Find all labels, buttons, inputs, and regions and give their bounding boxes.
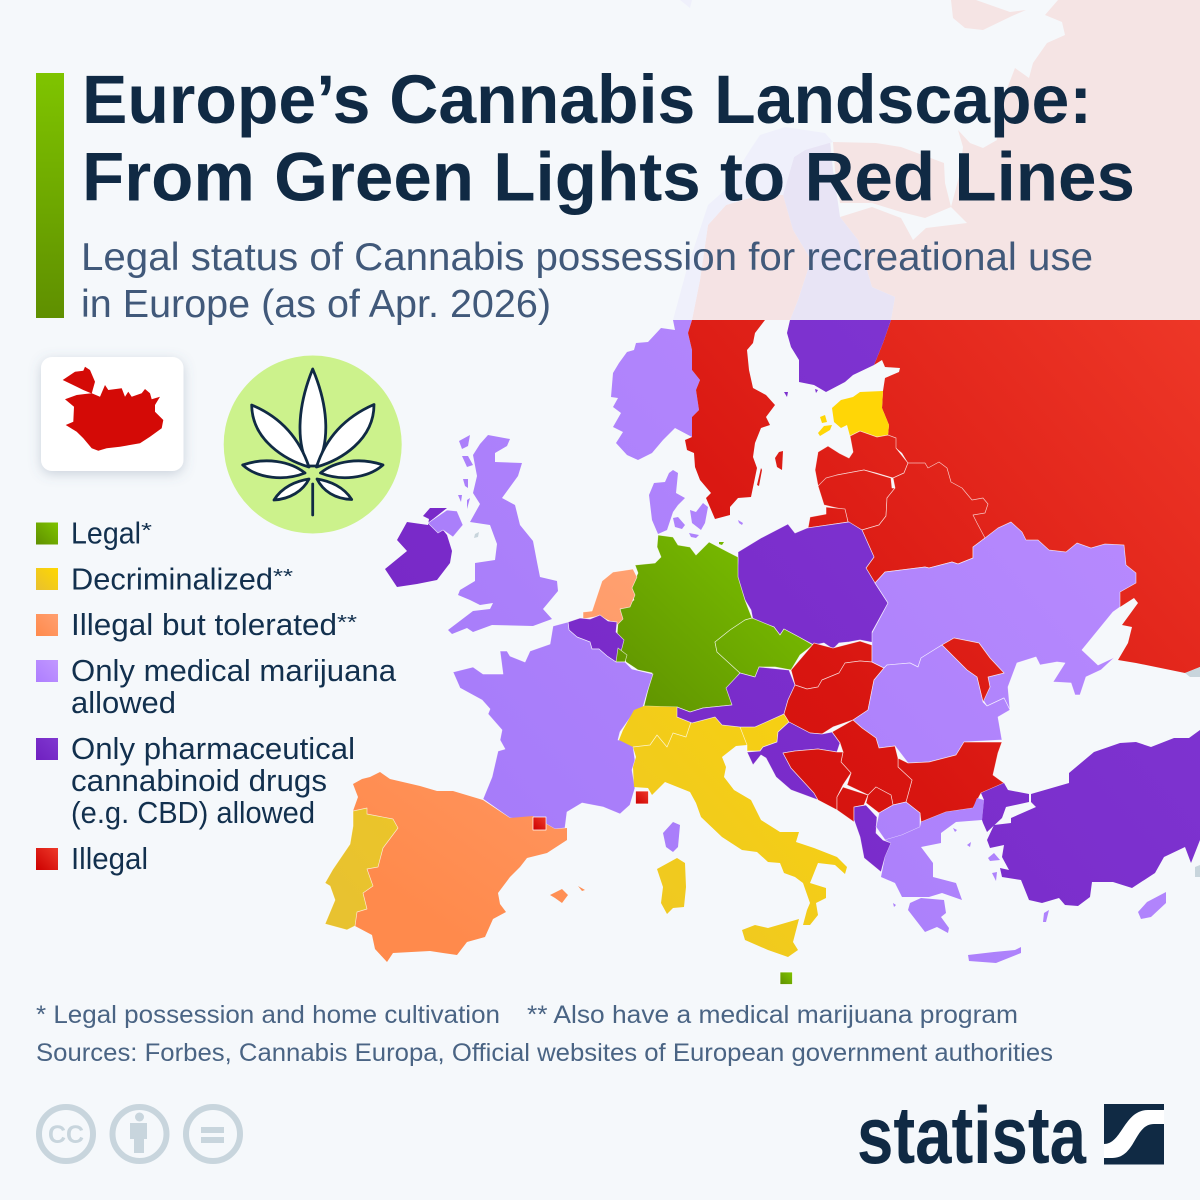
Romania [853,645,1010,763]
legend [36,516,396,876]
marker: Malta [780,972,792,984]
Latvia [815,431,908,486]
Kaliningrad [808,507,848,528]
Swiss border line [633,722,691,747]
footnotes: * Legal possession and home cultivation [36,1001,500,1029]
leaf: center [300,369,326,466]
Estonia [818,391,889,437]
marker: Monaco [636,791,648,804]
leaf: middle left [243,461,305,478]
logo mark [1104,1104,1164,1164]
Portugal [325,808,398,930]
title: From Green Lights to Red Lines [82,138,1135,216]
Slovenia [740,714,789,751]
Moldova [942,638,1004,702]
legend: only medical [36,654,396,720]
Finland [784,320,891,397]
Austria [677,667,795,727]
sources: Sources: Forbes, Cannabis Europa, Official websites of European government authorities [36,1039,1053,1067]
Denmark [649,470,743,538]
Albania [854,805,891,872]
legend: legal: * [141,520,152,542]
legend: only pharmaceutical: (e.g. CBD) allowed [71,796,315,830]
Belgium [568,615,624,662]
leaf: upper right [316,404,374,467]
Germany [617,535,752,712]
legend: only pharmaceutical: cannabinoid drugs [71,764,327,798]
Belarus [862,462,988,583]
legend: decriminalized: Decriminalized [71,562,273,596]
Serbia [832,720,912,805]
Statista logo: statista [857,1091,1087,1181]
Iceland card [41,357,184,471]
Luxembourg [616,648,627,662]
stem [311,484,314,515]
accent bar [36,73,64,318]
Norway [611,320,700,460]
Iceland shape [63,367,163,451]
Kosovo [866,787,893,813]
legend: only medical: allowed [71,686,176,720]
cannabis icon [224,356,402,534]
license icons [39,1107,240,1161]
Slovakia [791,641,872,689]
legend: only pharmaceutical [36,732,355,830]
subtitle: in Europe (as of Apr. 2026) [81,283,551,326]
legend: decriminalized: ** [273,566,293,588]
legend: only medical: Only medical marijuana [71,654,396,688]
Montenegro [837,787,868,822]
Netherlands [583,569,637,625]
legend: illegal: Illegal [71,842,148,876]
Croatia [747,722,840,800]
icon: CC: CC [48,1121,84,1149]
Hungary [784,661,884,734]
leaf: upper left [252,405,309,467]
leaf: lower right [317,479,352,500]
legend: illegal but tolerated: Illegal but tolerated [71,608,337,642]
Czechia [715,618,813,677]
icon: no derivatives [186,1107,240,1161]
Ukraine [872,522,1136,710]
Spain [353,772,585,962]
Lithuania [818,470,895,530]
map of Europe [325,320,1200,984]
title: Europe’s Cannabis Landscape: [82,61,1092,138]
Georgia and Syria (no data) [474,532,1200,877]
icon: attribution [112,1107,166,1161]
Rugen [719,542,724,545]
footnotes [36,1001,1053,1067]
Poland [737,522,888,649]
Greece [881,798,1049,963]
Turkey [981,730,1200,906]
footnotes: ** Also have a medical marijuana program [527,1001,1018,1029]
Northern Ireland [428,510,463,537]
Bulgaria [898,742,1004,822]
United Kingdom [448,435,558,634]
faded map: northern Europe above the fold [673,0,1200,320]
France [453,622,680,852]
legend: legal: Legal [71,516,141,550]
legend: only pharmaceutical: Only pharmaceutical [71,732,355,766]
subtitle: Legal status of Cannabis possession for recreational use [81,236,1093,279]
Ireland [385,508,452,587]
title [82,61,1135,216]
legend: illegal [36,842,148,876]
legend: illegal but tolerated: ** [337,612,357,634]
marker: Andorra [533,817,546,830]
Cyprus [1138,892,1166,919]
North Macedonia [876,802,920,840]
icon: CC [39,1107,93,1161]
leaf: middle right [320,461,383,478]
Bosnia and Herzegovina [783,749,851,810]
subtitle [81,236,1093,326]
legend: legal [36,516,152,550]
Sweden [685,320,783,519]
leaf: lower left [274,479,309,500]
Italy and Switzerland [619,706,847,957]
Russia [874,320,1200,673]
